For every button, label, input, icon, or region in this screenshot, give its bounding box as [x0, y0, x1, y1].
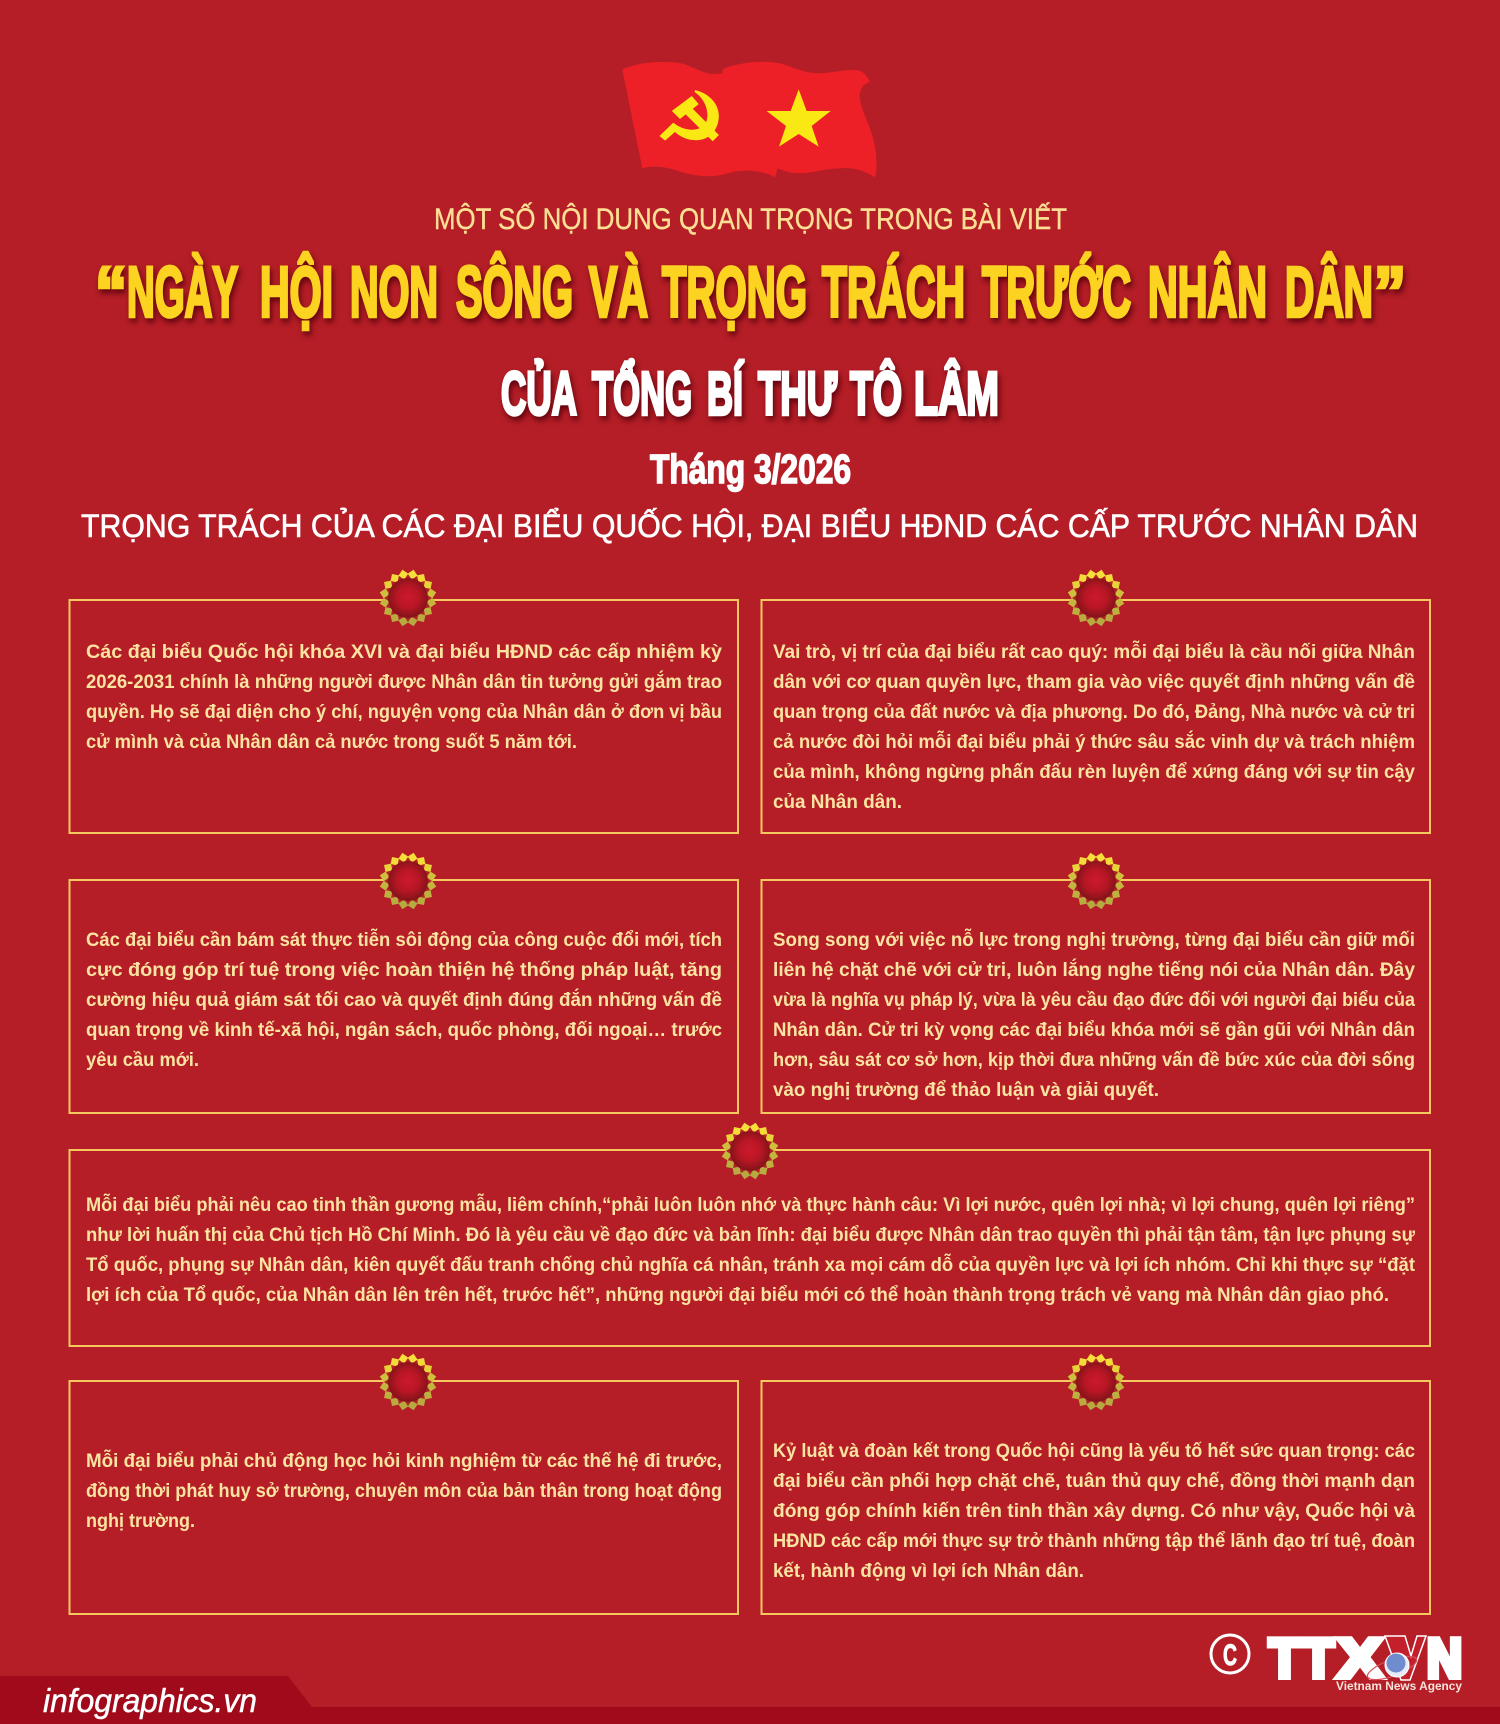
panel: discipline and unity: [762, 1353, 1430, 1614]
panel: exemplary integrity: [70, 1122, 1430, 1346]
date: Tháng 3/2026: [650, 446, 851, 492]
ornament: [1067, 569, 1125, 627]
panel: following reality: [70, 852, 738, 1113]
panel text: đồng thời phát huy sở trường, chuyên môn của bản thân trong hoạt động: [86, 1480, 722, 1502]
ornament: [1067, 1353, 1125, 1411]
panel text: [86, 641, 722, 753]
panel text: của Nhân dân.: [773, 791, 902, 813]
panel text: [86, 927, 722, 1071]
main title: NON: [350, 254, 438, 332]
panel text: dân với cơ quan quyền lực, tham gia vào việc quyết định những vấn đề: [773, 671, 1415, 693]
panel text: kết, hành động vì lợi ích Nhân dân.: [773, 1560, 1084, 1582]
TTXVN logo: [1269, 1627, 1462, 1693]
secondary title: LÂM: [914, 360, 999, 428]
panel text: quan trọng về kinh tế-xã hội, ngân sách, quốc phòng, đối ngoại… trước: [86, 1019, 722, 1041]
panel: voter contact: [762, 852, 1430, 1113]
panel: elected trust: [70, 569, 738, 833]
TTXVN logo: T: [1303, 1627, 1334, 1689]
panel text: [86, 1448, 722, 1532]
ornament: [379, 569, 437, 627]
panel text: hơn, sâu sát cơ sở hơn, kịp thời đưa những vấn đề bức xúc của đời sống: [773, 1049, 1415, 1071]
ornament: [721, 1122, 779, 1180]
panel: role of deputies: [762, 569, 1430, 833]
panel text: Các đại biểu Quốc hội khóa XVI và đại biểu HĐND các cấp nhiệm kỳ: [86, 641, 722, 663]
ornament: [1067, 852, 1125, 910]
panel text: vào nghị trường để thảo luận và giải quyết.: [773, 1079, 1159, 1101]
flag: [622, 62, 876, 177]
section heading: TRỌNG TRÁCH CỦA CÁC ĐẠI BIỂU QUỐC HỘI, ĐẠI BIỂU HĐND CÁC CẤP TRƯỚC NHÂN DÂN: [81, 508, 1418, 544]
ornament: [379, 852, 437, 910]
main title: ”: [1374, 254, 1406, 332]
secondary title: THƯ: [758, 360, 837, 428]
main title: DÂN: [1285, 252, 1373, 332]
panel text: Song song với việc nỗ lực trong nghị trường, từng đại biểu cần giữ mối: [773, 927, 1415, 951]
secondary title: TÔ: [850, 360, 902, 428]
panel text: Tổ quốc, phụng sự Nhân dân, kiên quyết đấu tranh chống chủ nghĩa cá nhân, tránh xa mọi cám dỗ của quyền lực và lợi ích nhóm. Chỉ khi thực sự “đặt: [86, 1252, 1415, 1276]
panel text: 2026-2031 chính là những người được Nhân dân tin tưởng gửi gắm trao: [86, 669, 722, 693]
panel text: đóng góp chính kiến trên tinh thần xây dựng. Có như vậy, Quốc hội và: [773, 1500, 1415, 1522]
main title: NGÀY: [127, 254, 238, 332]
panel text: cả nước đòi hỏi mỗi đại biểu phải ý thức sâu sắc vinh dự và trách nhiệm: [773, 729, 1415, 753]
copyright mark: C: [1223, 1639, 1237, 1672]
panel text: [773, 1440, 1415, 1582]
TTXVN logo: N: [1427, 1627, 1462, 1689]
panel text: liên hệ chặt chẽ với cử tri, luôn lắng nghe tiếng nói của Nhân dân. Đây: [773, 957, 1415, 981]
panel text: [773, 639, 1415, 813]
TTXVN logo: X: [1338, 1627, 1382, 1689]
main title: TRỌNG: [662, 254, 807, 332]
panel text: đại biểu cần phối hợp chặt chẽ, tuân thủ quy chế, đồng thời mạnh dạn: [773, 1470, 1415, 1492]
panel text: của mình, không ngừng phấn đấu rèn luyện để xứng đáng với sự tin cậy: [773, 761, 1415, 783]
panel text: như lời huấn thị của Chủ tịch Hồ Chí Minh. Đó là yêu cầu về đạo đức và bản lĩnh: đại biểu được Nhân dân trao quyền thì phải tận tâm, tận lực phụng sự: [86, 1224, 1416, 1246]
panel text: Mỗi đại biểu phải nêu cao tinh thần gương mẫu, liêm chính,“phải luôn luôn nhớ và thực hành câu: Vì lợi nước, quên lợi nhà; vì lợi chung, quên lợi riêng”: [86, 1192, 1415, 1216]
panel text: cường hiệu quả giám sát tối cao và quyết định đúng đắn những vấn đề: [86, 987, 722, 1011]
panel text: yêu cầu mới.: [86, 1049, 199, 1071]
panel: learning from predecessors: [70, 1353, 738, 1614]
main title: TRÁCH: [822, 254, 965, 332]
copyright mark: [1211, 1635, 1249, 1673]
panel text: Kỷ luật và đoàn kết trong Quốc hội cũng là yếu tố hết sức quan trọng: các: [773, 1440, 1415, 1462]
panel text: cực đóng góp trí tuệ trong việc hoàn thiện hệ thống pháp luật, tăng: [86, 959, 722, 981]
website label: infographics.vn: [43, 1682, 257, 1719]
panel text: quyền. Họ sẽ đại diện cho ý chí, nguyện vọng của Nhân dân ở đơn vị bầu: [86, 701, 722, 723]
panel text: HĐND các cấp mới thực sự trở thành những tập thể lãnh đạo trí tuệ, đoàn: [773, 1530, 1415, 1552]
panel text: quan trọng của đất nước và địa phương. Do đó, Đảng, Nhà nước và cử tri: [773, 701, 1415, 723]
panel text: [773, 927, 1415, 1101]
secondary title: [501, 358, 999, 428]
secondary title: CỦA: [501, 360, 577, 428]
panel text: [86, 1192, 1416, 1306]
main title: TRƯỚC: [982, 254, 1131, 332]
main title: NHÂN: [1148, 252, 1267, 332]
panel text: Các đại biểu cần bám sát thực tiễn sôi động của công cuộc đổi mới, tích: [86, 927, 722, 951]
main title: SÔNG: [456, 252, 573, 332]
panel text: vừa là nghĩa vụ pháp lý, vừa là yêu cầu đạo đức đối với người đại biểu của: [773, 989, 1415, 1011]
main title: VÀ: [589, 254, 648, 332]
subtitle: MỘT SỐ NỘI DUNG QUAN TRỌNG TRONG BÀI VIẾT: [434, 202, 1067, 236]
ornament: [379, 1353, 437, 1411]
agency name: Vietnam News Agency: [1336, 1679, 1462, 1693]
panel text: lợi ích của Tổ quốc, của Nhân dân lên trên hết, trước hết”, những người đại biểu mới có thể hoàn thành trọng trách vẻ vang mà Nhân dân giao phó.: [86, 1284, 1389, 1306]
main title: HỘI: [260, 252, 333, 332]
panel text: nghị trường.: [86, 1510, 195, 1532]
panel text: Vai trò, vị trí của đại biểu rất cao quý: mỗi đại biểu là cầu nối giữa Nhân: [773, 639, 1415, 663]
panel text: Nhân dân. Cử tri kỳ vọng các đại biểu khóa mới sẽ gần gũi với Nhân dân: [773, 1019, 1415, 1041]
footer band: [0, 1676, 1500, 1724]
TTXVN logo: T: [1269, 1627, 1300, 1689]
main title: “: [95, 254, 127, 332]
globe: [1365, 1652, 1419, 1684]
secondary title: TỔNG: [592, 358, 692, 428]
secondary title: BÍ: [707, 360, 744, 428]
panel text: Mỗi đại biểu phải chủ động học hỏi kinh nghiệm từ các thế hệ đi trước,: [86, 1448, 722, 1472]
panel text: cử mình và của Nhân dân cả nước trong suốt 5 năm tới.: [86, 731, 577, 753]
main title: [95, 252, 1406, 332]
